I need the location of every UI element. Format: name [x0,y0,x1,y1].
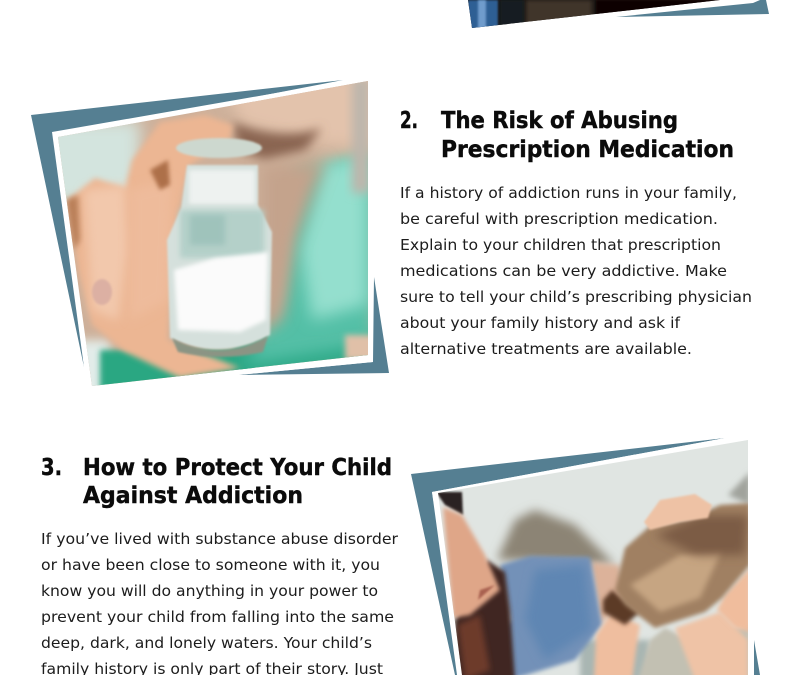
text block: section 2 body: medications can be very addictive. Make [400,262,727,280]
background trees [497,510,615,565]
woman sweater [498,554,604,675]
boy arms, tee and face [638,625,750,675]
text block: section 3 body [41,530,399,675]
woman hair [455,560,515,675]
text block: section 3 body: or have been close to someone with it, you [41,556,380,574]
text block: section 2 body: Explain to your children that prescription [400,236,721,254]
boy hair [615,503,750,628]
text block: section 3 body: deep, dark, and lonely waters. Your child’s [41,634,372,652]
frame accent: section 2 back shape [31,80,343,367]
frame accent: section 3 lower right [754,640,760,675]
white photo border [52,80,373,386]
heading: section 2: The Risk of Abusing [441,106,678,134]
text block: section 2 body: If a history of addiction runs in your family, [400,184,737,202]
heading: section 3: Against Addiction [83,481,303,509]
photo: hand holding pill bottle [58,81,368,386]
text block: section 3 body: know you will do anything in your power to [41,582,378,600]
text block: section 2 body: be careful with prescription medication. [400,210,718,228]
heading: section 2 [400,106,734,163]
woman face [443,507,500,618]
heading: section 3 [41,453,392,509]
photo: mother comforting child [430,435,750,675]
text block: section 3 body: prevent your child from falling into the same [41,608,394,626]
photo: top fragment [468,0,720,28]
mother's hand on head [644,494,712,530]
text block: section 2 body: sure to tell your child’s prescribing physician [400,288,752,306]
panel: section 2 photo [30,70,389,400]
frame accent: section 3 back shape [411,438,725,675]
hand [68,115,240,378]
text block: section 2 body: alternative treatments are available. [400,340,692,358]
bottle [167,165,272,349]
heading: section 2: 2. [400,106,418,134]
panel: top photo fragment [460,0,769,30]
frame accent: top photo [616,0,769,17]
frame accent: section 2 lower right [238,277,389,375]
heading: section 3: How to Protect Your Child [83,453,392,481]
text block: section 3 body: If you’ve lived with substance abuse disorder [41,530,399,548]
text block: section 2 body [400,184,752,358]
backdrop left [58,122,148,204]
heading: section 2: Prescription Medication [441,135,734,163]
text block: section 2 body: about your family history and ask if [400,314,681,332]
panel: section 3 photo [411,435,760,675]
white photo border [432,438,748,675]
heading: section 3: 3. [41,453,62,481]
